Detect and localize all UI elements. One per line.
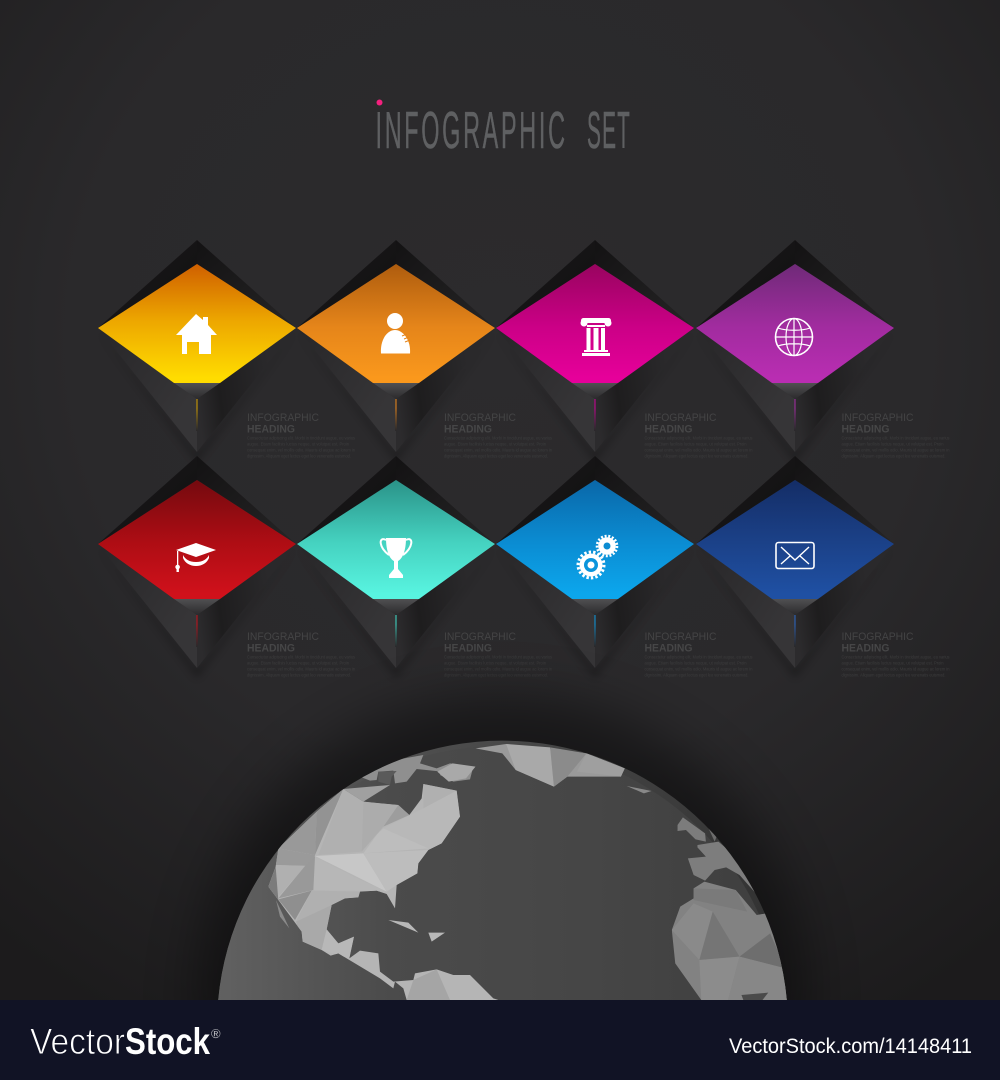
text block: gears: dignissim. Aliquam eget lectus eget leo venenatis euismod.: [644, 672, 748, 678]
text block: person: dignissim. Aliquam eget lectus eget leo venenatis euismod.: [444, 454, 548, 458]
text block: graduation: augue. Etiam facilisis luctus neque, ut volutpat est. Proin: [247, 660, 350, 666]
panel: mail: [695, 456, 895, 678]
text block: trophy: [444, 631, 553, 678]
title text: INFOGRAPHIC: [376, 100, 568, 160]
icon: person: [381, 313, 410, 354]
text block: trophy: INFOGRAPHIC: [444, 631, 516, 643]
globe shadow: [197, 695, 807, 1040]
text block: home: INFOGRAPHIC: [247, 412, 319, 424]
icon: envelope: [776, 542, 814, 568]
map: caribbean islands: [388, 920, 445, 942]
text block: graduation: dignissim. Aliquam eget lectus eget leo venenatis euismod.: [247, 672, 351, 678]
text block: graduation: [247, 631, 356, 678]
text block: trophy: Consectetur adipiscing elit. Morbi in tincidunt augue, eu varius: [444, 654, 552, 660]
map: europe: [678, 817, 759, 897]
text block: mail: HEADING: [842, 642, 890, 654]
text block: column: Consectetur adipiscing elit. Morbi in tincidunt augue, eu varius: [644, 436, 752, 440]
panel: home: [97, 240, 297, 462]
text block: mail: Consectetur adipiscing elit. Morbi in tincidunt augue, eu varius: [842, 654, 950, 660]
footer logo: Stock: [125, 1021, 210, 1062]
panel: column: [495, 240, 695, 462]
text block: globe: dignissim. Aliquam eget lectus eget leo venenatis euismod.: [842, 454, 946, 458]
text block: globe: HEADING: [842, 424, 890, 436]
text block: gears: INFOGRAPHIC: [644, 631, 717, 643]
text block: column: INFOGRAPHIC: [644, 412, 717, 424]
map: dark arctic notch: [378, 771, 397, 785]
text block: graduation: INFOGRAPHIC: [247, 631, 319, 643]
text block: column: HEADING: [644, 424, 692, 436]
map: baja: [276, 900, 289, 928]
text block: column: augue. Etiam facilisis luctus neque, ut volutpat est. Proin: [644, 442, 747, 446]
text block: globe: Consectetur adipiscing elit. Morbi in tincidunt augue, eu varius: [842, 436, 950, 440]
text block: home: dignissim. Aliquam eget lectus eget leo venenatis euismod.: [247, 454, 351, 458]
text block: trophy: consequat enim, vel mollis odio. Mauris id augue ac lorem in: [444, 666, 553, 672]
text block: graduation: consequat enim, vel mollis odio. Mauris id augue ac lorem in: [247, 666, 356, 672]
footer logo: [30, 1021, 221, 1062]
panel: gears: [495, 456, 695, 678]
text block: mail: INFOGRAPHIC: [842, 631, 914, 643]
map: north and central america: [260, 755, 513, 1000]
icon: graduation cap: [175, 543, 216, 572]
globe: [215, 738, 793, 1000]
text block: globe: INFOGRAPHIC: [842, 412, 914, 424]
text block: person: Consectetur adipiscing elit. Morbi in tincidunt augue, eu varius: [444, 436, 552, 440]
map: greenland: [437, 744, 652, 793]
text block: globe: consequat enim, vel mollis odio. Mauris id augue ac lorem in: [842, 448, 950, 452]
text block: person: augue. Etiam facilisis luctus neque, ut volutpat est. Proin: [444, 442, 547, 446]
text block: person: INFOGRAPHIC: [444, 412, 516, 424]
text block: mail: consequat enim, vel mollis odio. Mauris id augue ac lorem in: [842, 666, 950, 672]
text block: gears: augue. Etiam facilisis luctus neque, ut volutpat est. Proin: [644, 660, 747, 666]
text block: mail: [842, 631, 950, 678]
icon: gears: [578, 536, 617, 578]
panel: graduation: [97, 456, 297, 678]
text block: graduation: HEADING: [247, 642, 295, 654]
footer bar: [0, 1000, 1000, 1080]
map: africa: [672, 882, 787, 1000]
text block: home: augue. Etiam facilisis luctus neque, ut volutpat est. Proin: [247, 442, 350, 446]
panel: trophy: [296, 456, 496, 678]
panel: person: [296, 240, 496, 462]
text block: home: Consectetur adipiscing elit. Morbi in tincidunt augue, eu varius: [247, 436, 355, 440]
text block: globe: augue. Etiam facilisis luctus neque, ut volutpat est. Proin: [842, 442, 944, 446]
text block: gears: Consectetur adipiscing elit. Morbi in tincidunt augue, eu varius: [644, 654, 752, 660]
text block: home: consequat enim, vel mollis odio. Mauris id augue ac lorem in: [247, 448, 356, 452]
text block: gears: HEADING: [644, 642, 692, 654]
text block: column: dignissim. Aliquam eget lectus eget leo venenatis euismod.: [644, 454, 748, 458]
text block: mail: augue. Etiam facilisis luctus neque, ut volutpat est. Proin: [842, 660, 944, 666]
icon: trophy: [381, 538, 411, 578]
map: arctic gray wedge: [343, 785, 390, 802]
text block: graduation: Consectetur adipiscing elit. Morbi in tincidunt augue, eu varius: [247, 654, 355, 660]
text block: trophy: dignissim. Aliquam eget lectus eget leo venenatis euismod.: [444, 672, 548, 678]
text block: column: [644, 412, 753, 458]
text block: gears: [644, 631, 753, 678]
text block: mail: dignissim. Aliquam eget lectus eget leo venenatis euismod.: [842, 672, 946, 678]
footer image id: VectorStock.com/14148411: [729, 1035, 972, 1058]
text block: globe: [842, 412, 950, 458]
icon: globe: [776, 318, 812, 356]
text block: column: consequat enim, vel mollis odio. Mauris id augue ac lorem in: [644, 448, 753, 452]
title: [376, 100, 631, 160]
text block: person: HEADING: [444, 424, 492, 436]
text block: trophy: HEADING: [444, 642, 492, 654]
text block: trophy: augue. Etiam facilisis luctus neque, ut volutpat est. Proin: [444, 660, 547, 666]
panel: globe: [695, 240, 895, 462]
text block: person: consequat enim, vel mollis odio. Mauris id augue ac lorem in: [444, 448, 553, 452]
footer logo: Vector: [30, 1021, 125, 1062]
text block: gears: consequat enim, vel mollis odio. Mauris id augue ac lorem in: [644, 666, 753, 672]
icon: classical column: [580, 318, 612, 356]
text block: home: [247, 412, 356, 458]
title accent dot: [376, 100, 382, 106]
icon: house: [176, 314, 217, 354]
text block: person: [444, 412, 553, 458]
text block: home: HEADING: [247, 424, 295, 436]
footer logo: ®: [211, 1026, 221, 1041]
title text: SET: [587, 102, 631, 160]
map: arctic band: [349, 755, 472, 786]
